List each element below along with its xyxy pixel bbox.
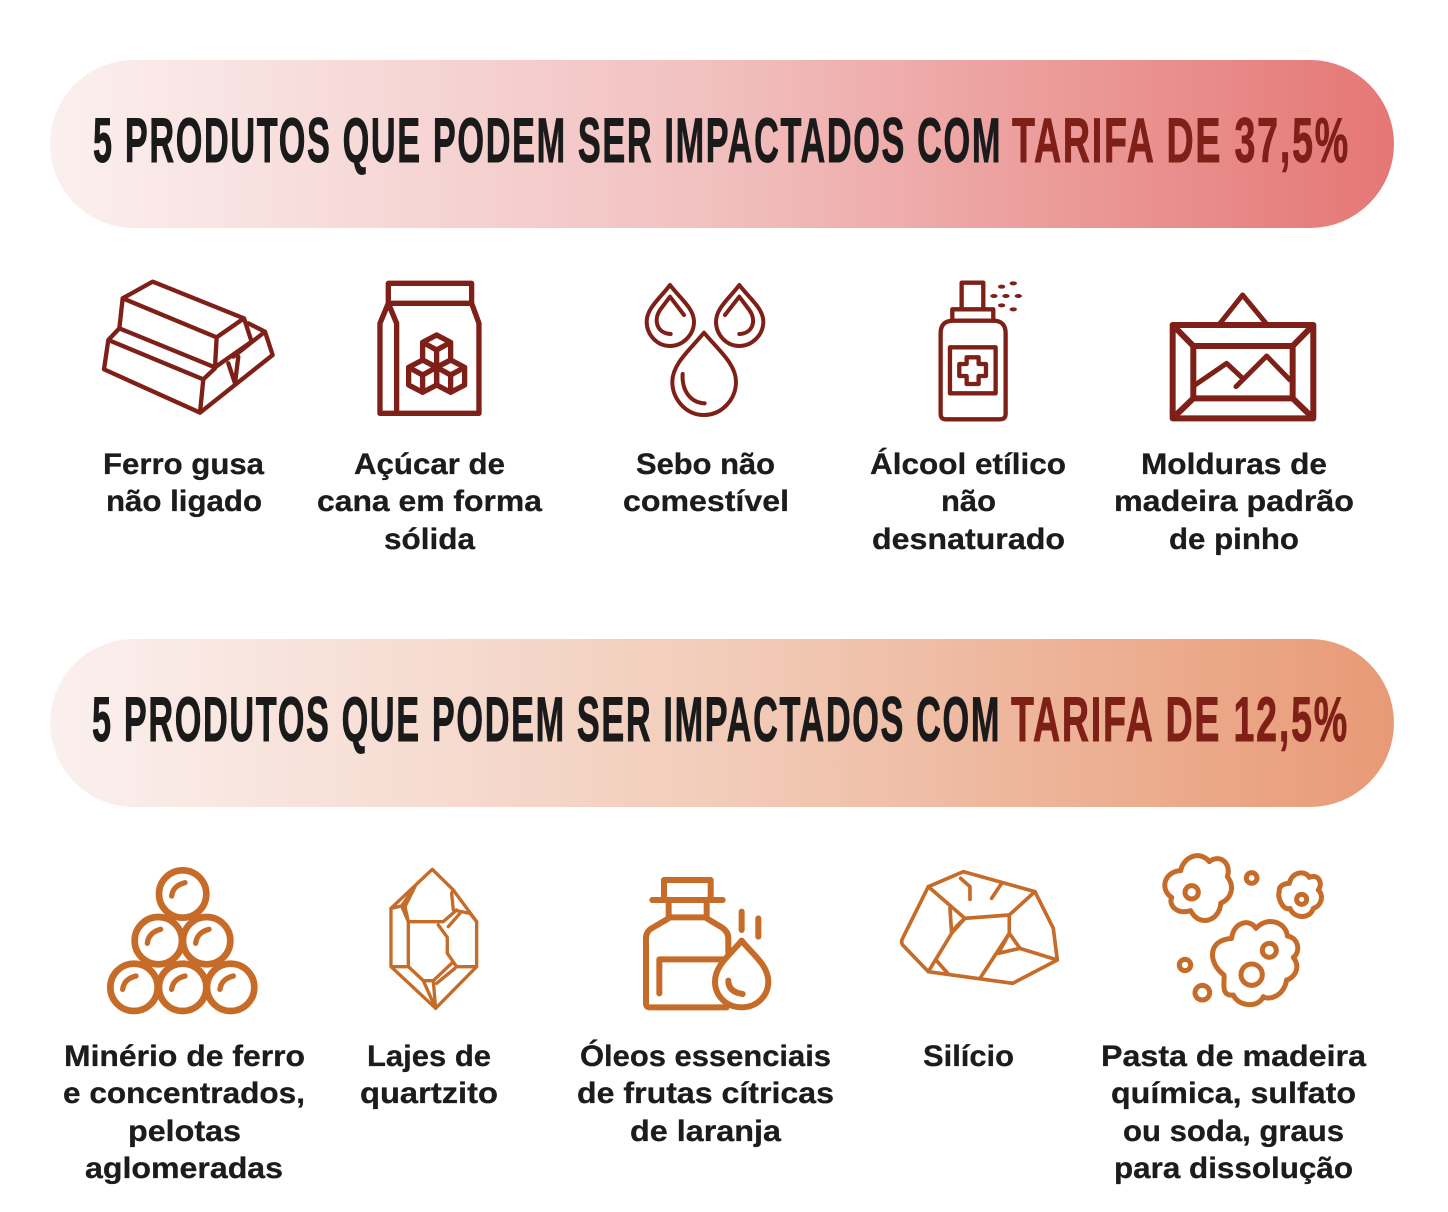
label: pasta de madeira: química, sulfato bbox=[1111, 1077, 1356, 1110]
label: álcool: não bbox=[941, 485, 996, 518]
label: pasta de madeira bbox=[1101, 1040, 1366, 1185]
label: açúcar bbox=[317, 448, 542, 556]
label: ferro gusa: Ferro gusa bbox=[103, 448, 264, 481]
label: açúcar: cana em forma bbox=[317, 485, 542, 518]
label: sebo: comestível bbox=[623, 485, 789, 518]
label: molduras bbox=[1114, 448, 1354, 556]
icon: wood pulp particles bbox=[1165, 856, 1321, 1005]
label: sebo: Sebo não bbox=[636, 448, 775, 481]
label: pasta de madeira: Pasta de madeira bbox=[1101, 1040, 1366, 1073]
label: ferro gusa bbox=[103, 448, 264, 518]
icon: silicon rock bbox=[902, 872, 1057, 983]
icon: iron ore pellets bbox=[110, 870, 254, 1011]
label: açúcar: sólida bbox=[384, 523, 475, 556]
label: pasta de madeira: para dissolução bbox=[1114, 1152, 1353, 1185]
label: quartzito: quartzito bbox=[360, 1077, 498, 1110]
label: quartzito: Lajes de bbox=[367, 1040, 491, 1073]
label: sebo bbox=[623, 448, 789, 518]
label: quartzito bbox=[360, 1040, 498, 1110]
icon: gold bars bbox=[104, 282, 273, 413]
label: óleos bbox=[577, 1039, 834, 1148]
label: óleos: Óleos essenciais bbox=[580, 1039, 831, 1073]
icon: picture frame bbox=[1173, 295, 1313, 418]
label: pasta de madeira: ou soda, graus bbox=[1123, 1115, 1344, 1148]
icon: sugar bag bbox=[380, 283, 479, 413]
label: silício: Silício bbox=[923, 1040, 1014, 1073]
icon: tallow drops bbox=[647, 285, 763, 415]
label: álcool bbox=[870, 447, 1066, 556]
icon: essential oil bottle bbox=[646, 880, 768, 1007]
label: minério: Minério de ferro bbox=[64, 1040, 305, 1073]
label: molduras: madeira padrão bbox=[1114, 485, 1354, 518]
label: ferro gusa: não ligado bbox=[106, 485, 262, 518]
label: óleos: de laranja bbox=[630, 1115, 781, 1148]
icon: spray bottle bbox=[941, 281, 1022, 419]
label: óleos: de frutas cítricas bbox=[577, 1077, 834, 1110]
header banner: tarifa 12,5% bbox=[50, 639, 1394, 807]
label: minério bbox=[63, 1040, 305, 1185]
label: álcool: Álcool etílico bbox=[870, 447, 1066, 481]
label: minério: e concentrados, bbox=[63, 1077, 305, 1110]
label: minério: pelotas bbox=[128, 1115, 241, 1148]
label: álcool: desnaturado bbox=[872, 523, 1065, 556]
icon: quartz crystal bbox=[391, 869, 477, 1008]
label: molduras: de pinho bbox=[1169, 523, 1299, 556]
header banner: tarifa 37,5% bbox=[50, 60, 1394, 228]
label: açúcar: Açúcar de bbox=[354, 448, 505, 481]
label: minério: aglomeradas bbox=[85, 1152, 283, 1185]
label: molduras: Molduras de bbox=[1141, 448, 1327, 481]
